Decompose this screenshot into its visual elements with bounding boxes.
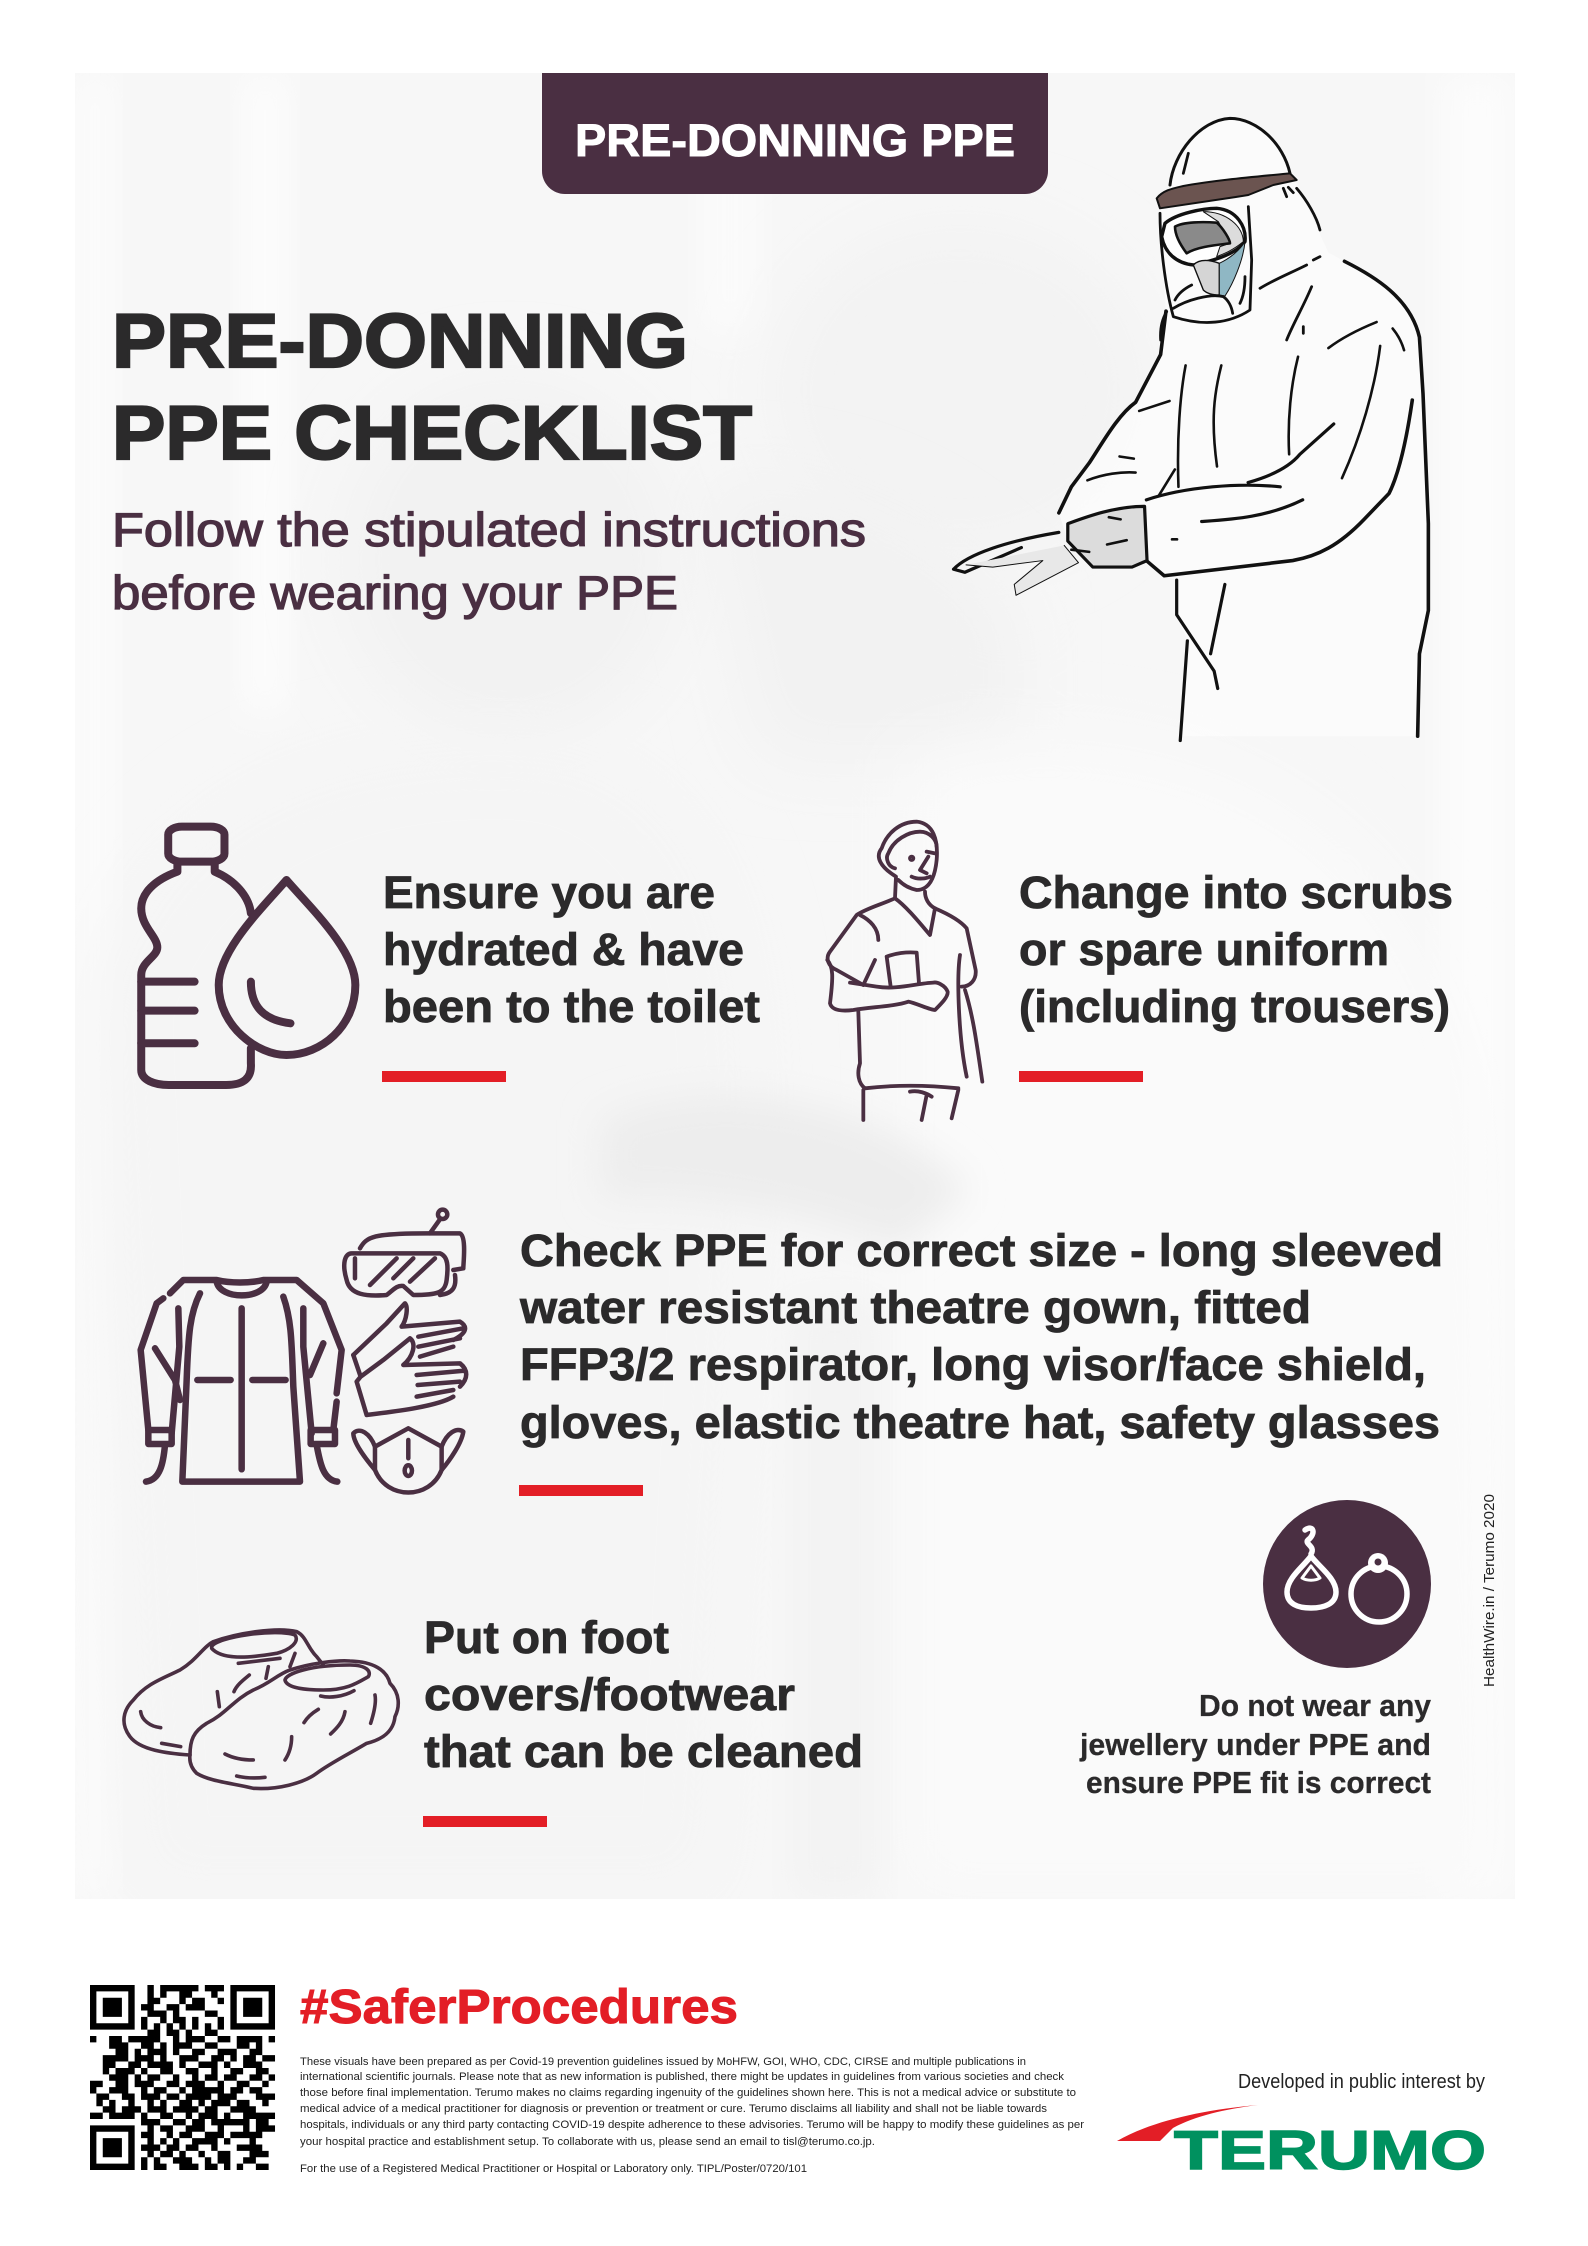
illustration: person in full PPE holding gloves — [954, 118, 1428, 741]
text — [1079, 1688, 1432, 1800]
text: Change into scrubs — [1019, 867, 1453, 918]
text: been to the toilet — [383, 981, 760, 1032]
icon: bottle and water drop — [141, 827, 355, 1085]
text: or spare uniform — [1019, 924, 1389, 975]
disclaimer: These visuals have been prepared as per Covid-19 prevention guidelines issued by MoHFW, GOI, WHO, CDC, CIRSE and multiple publications in — [300, 2056, 1026, 2068]
disclaimer: For the use of a Registered Medical Practitioner or Hospital or Laboratory only. TIPL/Poster/0720/101 — [300, 2163, 807, 2175]
disclaimer: medical advice of a medical practitioner for diagnosis or prevention or treatment or cure. Terumo disclaims all liability and shall not be liable towards — [300, 2103, 1048, 2115]
disclaimer: those before final implementation. Terumo makes no claims regarding ingenuity of the guidelines shown here. This is not a medical advice or substitute to — [300, 2087, 1076, 2099]
text: FFP3/2 respirator, long visor/face shield, — [520, 1339, 1426, 1390]
text: Check PPE for correct size - long sleeved — [520, 1225, 1443, 1276]
Terumo logo — [1117, 2105, 1486, 2181]
disclaimer — [300, 2056, 1084, 2175]
icon: nurse in scrubs — [827, 822, 982, 1120]
text: water resistant theatre gown, fitted — [519, 1282, 1311, 1333]
disclaimer: hospitals, individuals or any third party contacting COVID-19 despite adherence to these advisories. Terumo will be happy to modify these guidelines as per — [300, 2119, 1084, 2131]
red bar — [1019, 1071, 1143, 1082]
step 3: check PPE — [141, 1210, 1443, 1496]
step 1: hydration and toilet — [141, 827, 760, 1085]
step 2: scrubs — [827, 822, 1453, 1120]
title — [112, 299, 752, 476]
hashtag: #SaferProcedures — [300, 1981, 738, 2034]
background photo panel — [104, 151, 1425, 1899]
developed by: Developed in public interest by — [1238, 2071, 1485, 2093]
header tab — [542, 73, 1048, 194]
text: (including trousers) — [1019, 981, 1450, 1032]
text: that can be cleaned — [424, 1726, 863, 1777]
title: PPE CHECKLIST — [112, 391, 752, 476]
text: covers/footwear — [424, 1669, 795, 1720]
text: Ensure you are — [383, 867, 715, 918]
credit: HealthWire.in / Terumo 2020: HealthWire.in / Terumo 2020 — [1481, 1494, 1498, 1687]
text — [1019, 867, 1453, 1032]
icon: gown, goggles, gloves, respirator — [141, 1210, 466, 1492]
disclaimer: international scientific journals. Please note that as new information is published, there might be updates in guidelines from various societies and check — [300, 2071, 1065, 2083]
text: Put on foot — [424, 1612, 669, 1663]
red bar — [382, 1071, 506, 1082]
step 4: foot covers — [124, 1612, 863, 1827]
Terumo logo: TERUMO — [1174, 2119, 1486, 2181]
head with visor, goggles and respirator — [1157, 118, 1320, 340]
subtitle — [112, 503, 866, 619]
text: hydrated & have — [383, 924, 744, 975]
text: jewellery under PPE and — [1079, 1727, 1431, 1762]
text: ensure PPE fit is correct — [1086, 1765, 1431, 1800]
subtitle: Follow the stipulated instructions — [112, 503, 866, 556]
red bar — [519, 1485, 643, 1496]
note: no jewellery — [1079, 1500, 1432, 1800]
disclaimer: your hospital practice and establishment setup. To collaborate with us, please send an email to tisl@terumo.co.jp. — [300, 2136, 875, 2148]
header tab: PRE-DONNING PPE — [575, 115, 1015, 166]
text — [519, 1225, 1443, 1448]
subtitle: before wearing your PPE — [112, 566, 678, 619]
icon: earrings in circle — [1263, 1500, 1431, 1668]
red bar — [423, 1816, 547, 1827]
title: PRE-DONNING — [112, 299, 688, 384]
text: Do not wear any — [1199, 1688, 1432, 1723]
icon: foot covers — [124, 1630, 398, 1789]
text: gloves, elastic theatre hat, safety glasses — [520, 1397, 1440, 1448]
QR code — [90, 1988, 275, 2167]
text — [383, 867, 760, 1032]
text — [424, 1612, 863, 1777]
